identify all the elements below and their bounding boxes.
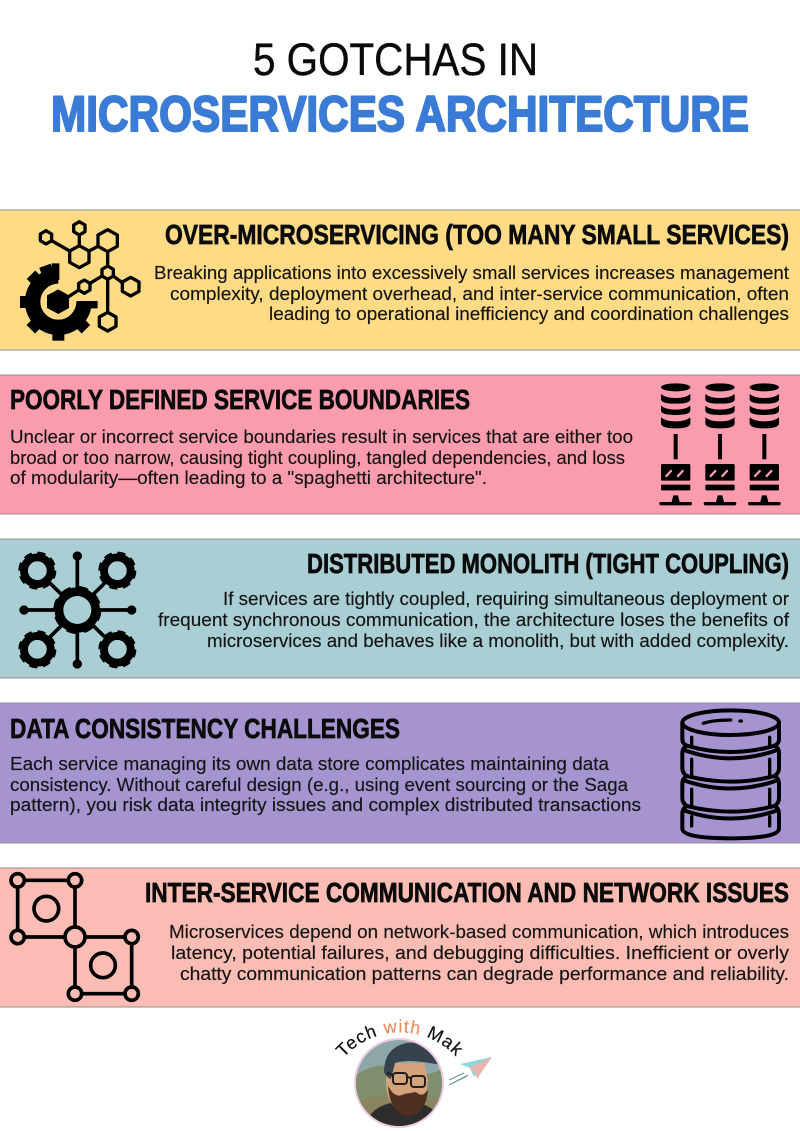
title xyxy=(51,34,749,142)
avatar portrait xyxy=(354,1038,444,1128)
panel: inter-service communication and network issues xyxy=(0,868,800,1007)
panel: over-microservicing xyxy=(0,210,800,350)
text block: consistency. Without careful design (e.g., using event sourcing or the Saga xyxy=(10,774,629,795)
title: 5 GOTCHAS IN xyxy=(253,34,538,85)
text block xyxy=(169,921,790,984)
panel: poorly defined service boundaries xyxy=(0,375,800,514)
text block: Breaking applications into excessively small services increases management xyxy=(154,262,789,283)
text block: complexity, deployment overhead, and inter-service communication, often xyxy=(170,283,789,304)
text block: If services are tightly coupled, requiring simultaneous deployment or xyxy=(223,588,789,609)
text block: latency, potential failures, and debugging difficulties. Inefficient or overly xyxy=(171,942,790,963)
icon: databases linked to servers xyxy=(659,383,781,505)
icon: gear and hexagon network xyxy=(20,222,139,341)
text block: microservices and behaves like a monolith, but with added complexity. xyxy=(207,630,789,651)
icon: hub gear with satellite gears xyxy=(19,551,136,669)
heading: DATA CONSISTENCY CHALLENGES xyxy=(10,713,400,744)
heading: POORLY DEFINED SERVICE BOUNDARIES xyxy=(10,384,470,415)
text block: chatty communication patterns can degrade performance and reliability. xyxy=(180,963,789,984)
curved logo text: Tech with Mak xyxy=(334,1019,463,1057)
text block: of modularity—often leading to a "spaghetti architecture". xyxy=(10,467,487,488)
text block: leading to operational inefficiency and coordination challenges xyxy=(269,303,789,324)
text block xyxy=(10,753,641,815)
text block: broad or too narrow, causing tight coupling, tangled dependencies, and loss xyxy=(10,447,625,468)
icon: paper plane xyxy=(449,1057,492,1085)
text block: Unclear or incorrect service boundaries result in services that are either too xyxy=(10,426,633,447)
text block xyxy=(10,426,633,488)
text block xyxy=(154,262,789,324)
panel: data consistency challenges xyxy=(0,703,800,843)
text block: Each service managing its own data store complicates maintaining data xyxy=(10,753,610,774)
icon: connected node squares xyxy=(11,874,138,1000)
text block: Microservices depend on network-based communication, which introduces xyxy=(169,921,789,942)
text block: pattern), you risk data integrity issues and complex distributed transactions xyxy=(10,794,641,815)
text block: frequent synchronous communication, the architecture loses the benefits of xyxy=(158,609,790,630)
text block xyxy=(158,588,790,651)
logo: Tech with Mak xyxy=(334,1019,492,1128)
panel: distributed monolith xyxy=(0,539,800,678)
icon: database cylinder xyxy=(682,710,779,838)
